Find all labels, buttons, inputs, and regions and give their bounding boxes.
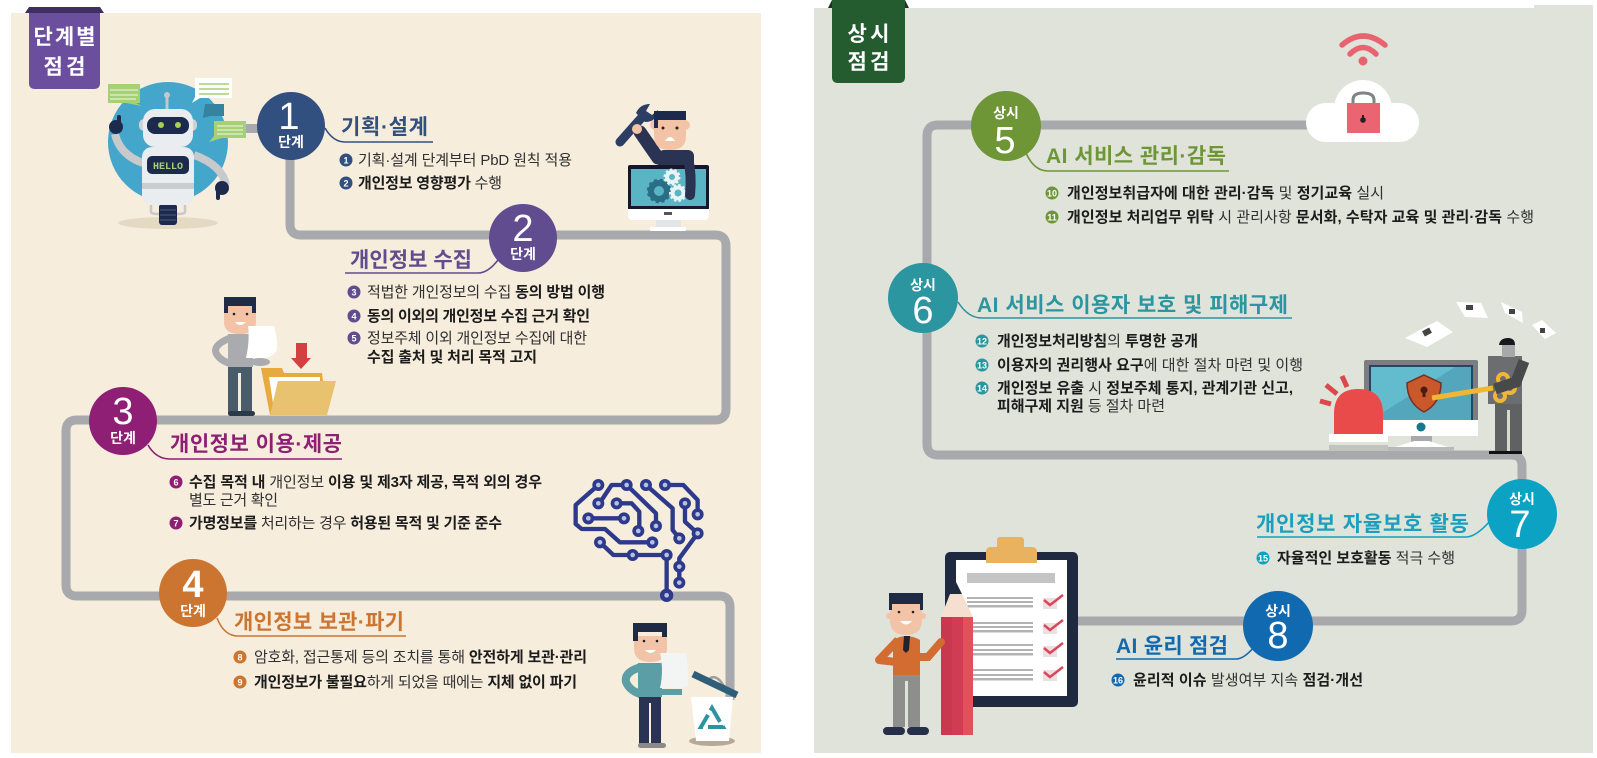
step 4 heading: 개인정보 보관·파기 [234,611,404,634]
icon: robot [108,78,246,229]
step 5 heading: AI 서비스 관리·감독 [1046,145,1226,168]
item 6 [170,474,542,509]
icon: hacker with key, monitor and siren [1320,302,1556,454]
icon: cloud with padlock [1306,80,1419,142]
badge: 단계별 점검: 단계별 [34,26,96,49]
step 6 circle [888,263,958,333]
step 7 circle: 상시 [1509,491,1535,507]
item 3: 3 [351,288,357,298]
item 7: 7 [173,518,179,528]
icon: robot: HELLO [153,162,183,173]
step 2 heading: 개인정보 수집 [350,249,472,272]
step 2: 개인정보 수집 [345,204,605,366]
item 5: 5 [351,334,357,344]
step 2 circle: 2 [512,208,534,250]
badge: 상시 점검: 점검 [848,51,890,74]
item 7: 가명정보를 처리하는 경우 허용된 목적 및 기준 준수 [189,515,502,532]
step 2 circle: 단계 [510,246,536,262]
step 4 circle: 4 [182,564,204,606]
step 8: AI 윤리 점검 [1112,591,1363,689]
step 4 circle [159,559,227,627]
icon: circuit brain [576,479,704,602]
badge: 단계별 점검 [25,7,104,89]
item 16: 16 [1113,676,1123,686]
item 9: 9 [237,678,243,688]
item 14: 14 [977,384,987,394]
icon: person with clipboard and pencil [879,537,1078,735]
item 8: 8 [237,652,243,662]
step 1 circle [257,92,325,160]
item 2: 개인정보 영향평가 수행 [358,175,502,192]
item 5: 정보주체 이외 개인정보 수집에 대한 [367,330,587,347]
item 15: 자율적인 보호활동 적극 수행 [1277,550,1455,567]
step 4 circle: 단계 [180,603,206,619]
item 4: 4 [351,312,357,322]
item 3: 적법한 개인정보의 수집 동의 방법 이행 [367,284,605,301]
item 9: 개인정보가 불필요하게 되었을 때에는 지체 없이 파기 [254,674,577,691]
step 5 circle: 상시 [993,105,1019,121]
item 5 [348,330,587,366]
icon: person with documents and folder [216,297,336,416]
item 6: 별도 근거 확인 [189,492,278,509]
item 6: 6 [173,478,179,488]
item 12: 12 [977,336,987,346]
item 14: 피해구제 지원 등 절차 마련 [997,398,1165,415]
icon: wifi [1342,36,1385,66]
icon: person disposing documents in recycling bin [626,623,737,748]
step 7 heading: 개인정보 자율보호 활동 [1256,513,1469,536]
item 14 [976,380,1293,415]
item 11: 11 [1047,212,1057,222]
item 15: 15 [1258,554,1268,564]
step 8 circle [1243,591,1313,661]
item 5: 수집 출처 및 처리 목적 고지 [367,349,537,366]
step 5 circle: 5 [994,120,1016,162]
step 3: 개인정보 이용·제공 [89,387,542,532]
step 1: 기획·설계 [257,92,572,192]
item 13: 이용자의 권리행사 요구에 대한 절차 마련 및 이행 [997,357,1303,374]
step 3 circle [89,387,157,455]
step 6: AI 서비스 이용자 보호 및 피해구제 [888,263,1303,415]
step 7 circle [1487,479,1557,549]
item 8: 암호화, 접근통제 등의 조치를 통해 안전하게 보관·관리 [254,649,587,666]
panel: 단계별 점검 [11,7,761,753]
step 7 circle: 7 [1509,504,1531,546]
step 6 circle: 6 [912,290,934,332]
step 8 circle: 상시 [1265,603,1291,619]
step 3 circle: 단계 [110,430,136,446]
item 16: 윤리적 이슈 발생여부 지속 점검·개선 [1133,672,1363,689]
item 11: 개인정보 처리업무 위탁 시 관리사항 문서화, 수탁자 교육 및 관리·감독 수행 [1067,209,1534,226]
step 3 heading: 개인정보 이용·제공 [170,433,342,456]
step 4: 개인정보 보관·파기 [159,559,587,691]
step 8 circle: 8 [1267,615,1289,657]
item 1: 기획·설계 단계부터 PbD 원칙 적용 [358,152,572,169]
step 1 circle: 1 [278,96,300,138]
panel: 상시 점검 [814,0,1593,753]
step 6 heading: AI 서비스 이용자 보호 및 피해구제 [977,294,1288,317]
icon: mechanic with wrench at monitor [620,104,709,231]
step 8 heading: AI 윤리 점검 [1116,635,1228,658]
item 10: 10 [1047,188,1057,198]
item 13: 13 [977,360,987,370]
item 14: 개인정보 유출 시 정보주체 통지, 관계기관 신고, [997,380,1293,397]
item 1: 1 [343,156,349,166]
item 2: 2 [343,178,349,188]
item 4: 동의 이외의 개인정보 수집 근거 확인 [367,308,590,325]
step 1 circle: 단계 [278,134,304,150]
badge: 단계별 점검: 점검 [44,56,86,79]
step 3 circle: 3 [112,391,134,433]
step 6 circle: 상시 [910,277,936,293]
badge: 상시 점검: 상시 [848,23,890,46]
step 5: AI 서비스 관리·감독 [971,91,1534,226]
step 1 heading: 기획·설계 [341,116,428,139]
step 5 circle [971,91,1041,162]
step 2 circle [489,204,557,272]
item 6: 수집 목적 내 개인정보 이용 및 제3자 제공, 목적 외의 경우 [189,474,542,491]
item 12: 개인정보처리방침의 투명한 공개 [997,333,1198,350]
item 10: 개인정보취급자에 대한 관리·감독 및 정기교육 실시 [1067,185,1384,202]
step 7: 개인정보 자율보호 활동 [1256,479,1557,567]
badge: 상시 점검 [828,0,909,83]
